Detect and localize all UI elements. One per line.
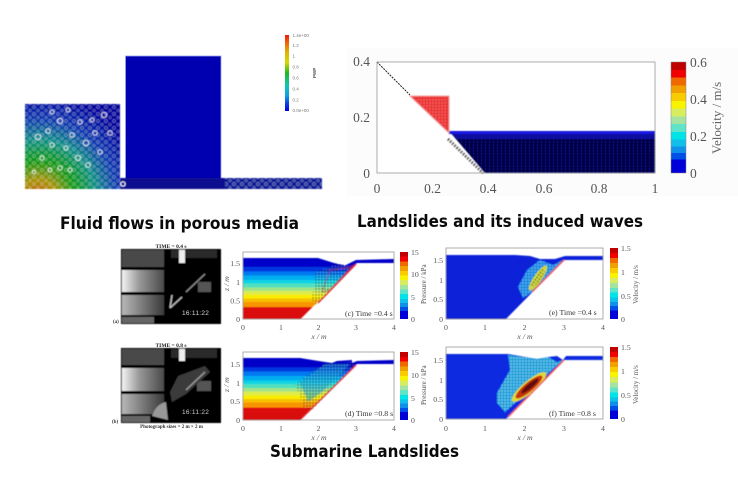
- pressure colour bar: 0: [411, 416, 415, 425]
- axis ticks: 1: [236, 278, 240, 287]
- photo a: experiment at 0.4 s: (a): [113, 320, 119, 325]
- chart e: velocity at 0.4 s: [433, 244, 640, 341]
- axis ticks: 2: [523, 323, 527, 332]
- axis labels: 0.4: [353, 54, 370, 69]
- velocity colour bar: 1.5: [621, 244, 631, 253]
- chart c: pressure at 0.4 s: [222, 248, 428, 341]
- photo a: experiment at 0.4 s: [113, 244, 221, 325]
- velocity colour bar: Velocity / m/s: [632, 265, 640, 304]
- photo a: experiment at 0.4 s: 16:11:22: [182, 310, 209, 317]
- pressure colour bar: 10: [411, 270, 419, 279]
- pressure colour bar: 5: [411, 394, 415, 403]
- axis ticks: (f) Time =0.8 s: [549, 409, 596, 418]
- axis ticks: x / m: [516, 332, 533, 341]
- chart background: [347, 48, 738, 196]
- velocity colour bar: 0: [690, 166, 697, 181]
- pressure colour bar: 0: [411, 315, 415, 324]
- velocity colour bar: Velocity / m/s: [632, 365, 640, 404]
- velocity colour bar: 0.5: [621, 292, 631, 301]
- sliding red block: [410, 96, 449, 133]
- axis labels: 0.2: [424, 181, 441, 196]
- axis labels: 0.6: [536, 181, 553, 196]
- pressure colour bar: 1.2: [292, 43, 299, 48]
- axis ticks: 0.5: [230, 296, 240, 306]
- axis ticks: x / m: [516, 433, 533, 442]
- velocity field: [446, 354, 603, 419]
- tall fluid column: [126, 56, 221, 179]
- velocity colour bar: 1: [621, 367, 625, 376]
- photo b: experiment at 0.8 s: 16:11:22: [182, 409, 209, 416]
- axis ticks: 1: [236, 379, 240, 388]
- title: landslides: Landslides and its induced waves: [357, 212, 643, 231]
- pressure colour bar: 0.8: [292, 64, 299, 70]
- chart f: velocity at 0.8 s: [433, 343, 640, 442]
- velocity colour bar: 0: [621, 315, 625, 324]
- axis ticks: (c) Time =0.4 s: [345, 309, 393, 318]
- axis ticks: 4: [392, 424, 396, 433]
- axis ticks: [222, 360, 396, 442]
- axis ticks: 1.5: [230, 360, 240, 369]
- velocity colour bar: [610, 244, 640, 324]
- axis labels: 0: [374, 181, 381, 196]
- rough submerged slope: [448, 139, 483, 173]
- plot area: [377, 62, 655, 173]
- pressure colour bar: [400, 248, 428, 324]
- axis ticks: 2: [317, 323, 321, 332]
- axis ticks: 0: [444, 424, 448, 433]
- velocity colour bar: 0: [621, 415, 625, 424]
- velocity colour bar: 1: [621, 268, 625, 277]
- pressure colour bar: 0.6: [292, 76, 299, 80]
- axis labels: 0.8: [591, 181, 608, 196]
- velocity colour bar: [610, 343, 640, 424]
- velocity colour bar: 0.5: [621, 391, 631, 400]
- axis ticks: z / m: [222, 276, 231, 292]
- axis labels: 0.4: [480, 181, 497, 196]
- axis ticks: [433, 356, 605, 442]
- axis ticks: z / m: [222, 377, 231, 393]
- axis ticks: (d) Time =0.8 s: [345, 409, 393, 418]
- pressure colour bar: [400, 348, 428, 425]
- axis ticks: 0.5: [433, 295, 443, 304]
- pressure colour bar: PWP: [312, 68, 317, 78]
- axis ticks: 0: [439, 315, 443, 324]
- axis ticks: 4: [392, 323, 396, 332]
- pressure colour bar: 5: [411, 293, 415, 302]
- pressure colour bar: 0.2: [292, 98, 299, 102]
- photo b: experiment at 0.8 s: (b): [112, 420, 118, 425]
- axis ticks: 3: [562, 323, 566, 332]
- pressure colour bar: 0.4: [292, 86, 299, 92]
- axis ticks: 1: [483, 323, 487, 332]
- chart d: pressure at 0.8 s: [222, 348, 428, 442]
- axis labels: 1: [652, 181, 658, 196]
- axis ticks: 1: [279, 424, 283, 433]
- axis ticks: x / m: [310, 332, 327, 341]
- porous granular block: [25, 104, 120, 189]
- axis ticks: 0: [236, 416, 240, 425]
- axis ticks: 1: [439, 376, 443, 385]
- axis ticks: 0: [444, 323, 448, 332]
- axis ticks: x / m: [310, 433, 327, 442]
- axis labels: 0.2: [353, 110, 370, 125]
- velocity colour bar: Velocity / m/s: [709, 82, 724, 154]
- axis ticks: 4: [601, 323, 605, 332]
- axis ticks: [433, 256, 605, 341]
- title: submarine landslides: Submarine Landslides: [270, 442, 459, 461]
- axis ticks: 0: [241, 424, 245, 433]
- axis ticks: 3: [354, 424, 358, 433]
- velocity field: [446, 255, 603, 319]
- panel: fluid flows in porous media: [25, 33, 322, 189]
- title: fluid flows: Fluid flows in porous media: [60, 214, 299, 233]
- axis ticks: 1: [483, 424, 487, 433]
- axis ticks: 0: [241, 323, 245, 332]
- pressure field: [243, 258, 394, 319]
- panel: landslides and induced waves chart: [347, 48, 738, 196]
- axis ticks: 2: [317, 424, 321, 433]
- axis ticks: 1.5: [433, 256, 443, 265]
- axis ticks: (e) Time =0.4 s: [549, 308, 597, 317]
- slope line: [377, 62, 410, 95]
- axis ticks: 2: [523, 424, 527, 433]
- velocity colour bar: 0.6: [690, 55, 707, 70]
- pressure colour bar: 15: [411, 348, 419, 357]
- pressure field: [243, 358, 394, 420]
- velocity colour bar: 0.4: [690, 92, 707, 107]
- pressure colour bar: Pressure / kPa: [420, 263, 428, 304]
- velocity colour bar: 1.5: [621, 343, 631, 352]
- pressure colour bar: 10: [411, 371, 419, 380]
- axis ticks: 3: [562, 424, 566, 433]
- pressure colour bar: 1.4e+00: [292, 33, 309, 38]
- axis ticks: 1.5: [230, 259, 240, 268]
- pressure colour bar: Pressure / kPa: [420, 364, 428, 405]
- photo b: experiment at 0.8 s: [112, 343, 221, 430]
- photo b: experiment at 0.8 s: Photograph sizes = 2 m × 2 m: [140, 425, 204, 430]
- axis labels: 0: [363, 166, 370, 181]
- axis ticks: 1: [439, 276, 443, 285]
- submerged water body: [449, 131, 655, 173]
- velocity colour bar: [671, 55, 724, 181]
- axis labels: [353, 54, 658, 196]
- photo b: experiment at 0.8 s: TIME = 0.8 s: [156, 343, 186, 349]
- pressure colour bar: 0.0e+00: [292, 108, 309, 113]
- bottom porous strip: [120, 178, 322, 189]
- axis ticks: 0.5: [433, 395, 443, 404]
- axis ticks: 1.5: [433, 356, 443, 365]
- photo a: experiment at 0.4 s: TIME = 0.4 s: [156, 244, 186, 250]
- axis ticks: 1: [279, 323, 283, 332]
- pressure colour bar: [285, 33, 317, 113]
- axis ticks: 3: [354, 323, 358, 332]
- pressure colour bar: 1: [292, 54, 296, 58]
- axis ticks: 0.5: [230, 397, 240, 406]
- axis ticks: 0: [236, 315, 240, 324]
- axis ticks: 0: [439, 415, 443, 424]
- axis ticks: [222, 259, 396, 341]
- pressure colour bar: 15: [411, 248, 419, 257]
- axis ticks: 4: [601, 424, 605, 433]
- velocity colour bar: 0.2: [690, 129, 707, 144]
